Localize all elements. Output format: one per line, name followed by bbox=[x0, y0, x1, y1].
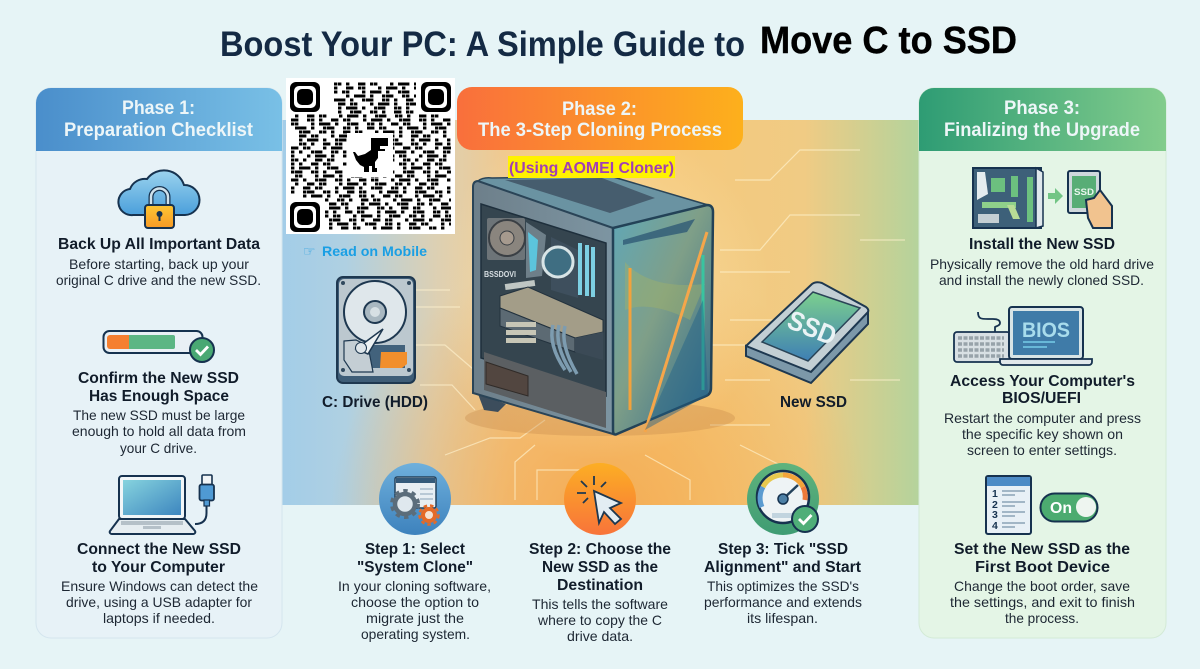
icon: C drive HDD bbox=[337, 277, 415, 383]
item 2 text: screen to enter settings. bbox=[967, 442, 1117, 458]
step 2 text: This tells the software bbox=[532, 596, 668, 612]
icon: on toggle bbox=[1040, 494, 1098, 522]
item 3 text: the process. bbox=[1005, 610, 1079, 626]
icon: boot order list: 3 bbox=[992, 509, 998, 521]
title bbox=[220, 20, 1017, 64]
icon: keyboard and BIOS laptop: BIOS bbox=[1022, 319, 1070, 342]
item 1 text bbox=[930, 236, 1154, 288]
step 1 text bbox=[338, 541, 491, 642]
step 1 text: Step 1: Select bbox=[365, 541, 466, 558]
item 1 text: and install the newly cloned SSD. bbox=[939, 272, 1144, 288]
item 3 text: Set the New SSD as the bbox=[954, 541, 1130, 558]
icon: keyboard and BIOS laptop bbox=[954, 307, 1092, 365]
icon: new SSD bbox=[746, 282, 868, 383]
phase 3 header bbox=[919, 88, 1166, 151]
item 2 text: your C drive. bbox=[120, 440, 197, 456]
step 2 text: drive data. bbox=[567, 628, 633, 644]
item 3 text: to Your Computer bbox=[92, 559, 225, 576]
item 2 text: BIOS/UEFI bbox=[1002, 390, 1081, 407]
step 2 text bbox=[529, 541, 671, 644]
icon: window and gears bbox=[379, 463, 451, 535]
item 3 text: Ensure Windows can detect the bbox=[61, 578, 258, 594]
illustration: PC tower: BSSDOVI bbox=[484, 270, 516, 279]
icon: dinosaur bbox=[353, 138, 388, 172]
step 3 text: Step 3: Tick "SSD bbox=[718, 541, 848, 558]
item 1 text: original C drive and the new SSD. bbox=[56, 272, 261, 288]
item 1 text: Before starting, back up your bbox=[69, 256, 249, 272]
step 3 text: Alignment" and Start bbox=[704, 559, 862, 576]
item 3 text: Connect the New SSD bbox=[77, 541, 241, 558]
item 3 text bbox=[61, 541, 258, 626]
icon: boot order list: 1 bbox=[992, 488, 998, 500]
item 3 text bbox=[950, 541, 1135, 626]
item 3 text: the settings, and exit to finish bbox=[950, 594, 1135, 610]
icon: laptop with USB adapter bbox=[110, 475, 214, 534]
item 3 text: First Boot Device bbox=[975, 559, 1110, 576]
central gradient band bbox=[282, 120, 919, 505]
step 3 text: performance and extends bbox=[704, 594, 862, 610]
step 3 text: its lifespan. bbox=[747, 610, 818, 626]
SSD label: New SSD bbox=[780, 394, 847, 411]
step 3 text: This optimizes the SSD's bbox=[707, 578, 859, 594]
item 1 text bbox=[56, 236, 261, 288]
step 1 text: migrate just the bbox=[366, 610, 464, 626]
step 2 text: where to copy the C bbox=[537, 612, 662, 628]
title: Move C to SSD bbox=[760, 20, 1017, 62]
item 2 text: Has Enough Space bbox=[89, 388, 229, 405]
icon: cloud with padlock bbox=[118, 170, 199, 228]
panel: phase 1 preparation checklist bbox=[36, 88, 282, 638]
icon: install SSD into case bbox=[973, 168, 1112, 228]
panel: phase 3 finalizing the upgrade bbox=[919, 88, 1166, 638]
phase 2 header: The 3-Step Cloning Process bbox=[478, 120, 722, 141]
step 1 bbox=[338, 463, 491, 642]
step 1 text: operating system. bbox=[361, 626, 470, 642]
item 2 text: enough to hold all data from bbox=[72, 423, 246, 439]
item 2 text: Confirm the New SSD bbox=[78, 370, 239, 387]
phase 1 header bbox=[36, 88, 282, 151]
item 3 text: laptops if needed. bbox=[103, 610, 215, 626]
callout: using AOMEI Cloner: (Using AOMEI Cloner) bbox=[509, 160, 674, 177]
step 2 text: Destination bbox=[557, 577, 643, 594]
icon: boot order list: 4 bbox=[992, 520, 998, 532]
phase 1 header: Phase 1: bbox=[122, 98, 195, 119]
item 2 text bbox=[944, 373, 1141, 458]
phase 2 header: Phase 2: bbox=[562, 99, 637, 120]
icon: storage capacity bar with check bbox=[104, 331, 214, 362]
step 2 text: New SSD as the bbox=[542, 559, 658, 576]
icon: mouse cursor click bbox=[564, 463, 636, 535]
HDD label: C: Drive (HDD) bbox=[322, 394, 428, 411]
step 2 text: Step 2: Choose the bbox=[529, 541, 671, 558]
icon: boot order list: 2 bbox=[992, 499, 998, 511]
step 1 text: choose the option to bbox=[351, 594, 479, 610]
step 1 text: "System Clone" bbox=[357, 559, 473, 576]
phase 2 header bbox=[457, 87, 743, 150]
item 2 text: the specific key shown on bbox=[962, 426, 1123, 442]
illustration: PC tower bbox=[465, 176, 735, 436]
item 1 text: Physically remove the old hard drive bbox=[930, 256, 1154, 272]
icon: on toggle: On bbox=[1050, 500, 1072, 517]
item 2 text bbox=[72, 370, 246, 456]
step 3 bbox=[704, 463, 862, 626]
icon: new SSD: SSD bbox=[783, 305, 841, 351]
item 2 text: The new SSD must be large bbox=[73, 407, 245, 423]
phase 1 header: Preparation Checklist bbox=[64, 120, 254, 141]
item 1 text: Back Up All Important Data bbox=[58, 236, 260, 253]
item 3 text: drive, using a USB adapter for bbox=[66, 594, 252, 610]
item 2 text: Access Your Computer's bbox=[950, 373, 1135, 390]
item 2 text: Restart the computer and press bbox=[944, 410, 1141, 426]
icon: boot order list bbox=[986, 476, 1031, 534]
item 1 text: Install the New SSD bbox=[969, 236, 1115, 253]
phase 3 header: Finalizing the Upgrade bbox=[944, 120, 1140, 141]
read on mobile link: Read on Mobile bbox=[322, 243, 427, 259]
item 3 text: Change the boot order, save bbox=[954, 578, 1130, 594]
QR code bbox=[286, 78, 455, 234]
step 3 text bbox=[704, 541, 862, 626]
read on mobile link: ☞ bbox=[303, 244, 316, 260]
icon: speedometer with check bbox=[747, 463, 819, 535]
step 1 text: In your cloning software, bbox=[338, 578, 491, 594]
phase 3 header: Phase 3: bbox=[1004, 98, 1080, 119]
step 2 bbox=[529, 463, 671, 644]
icon: install SSD into case: SSD bbox=[1074, 187, 1095, 197]
title: Boost Your PC: A Simple Guide to bbox=[220, 25, 745, 64]
